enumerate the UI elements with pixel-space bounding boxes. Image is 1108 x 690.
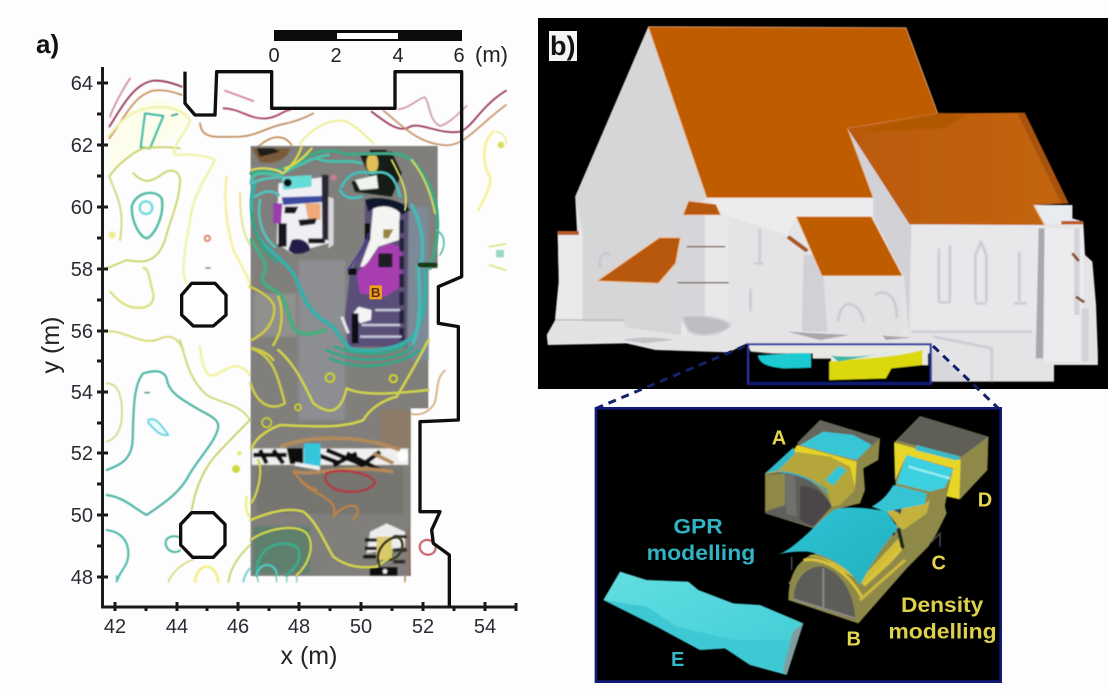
panel label: a): a)	[36, 29, 59, 59]
x axis	[104, 602, 516, 670]
y axis: 54	[71, 382, 93, 404]
label: Density modelling	[888, 593, 997, 643]
y axis: 62	[71, 135, 93, 157]
letter labels in inset: B	[846, 628, 861, 650]
recess wall between roofs	[848, 128, 911, 332]
panel b: 3D church model	[538, 18, 1108, 389]
letter labels in inset: D	[978, 490, 992, 512]
vaulted structure B (upper part)	[777, 507, 907, 617]
windows and wall details	[600, 228, 1032, 382]
label: GPR modelling: modelling	[647, 541, 755, 565]
buried structures in overview	[748, 345, 930, 368]
scale bar: 4	[392, 45, 404, 67]
letter labels in inset	[772, 428, 992, 650]
vaulted structure B (front arch)	[788, 533, 940, 623]
x axis: 54	[474, 616, 496, 638]
top-left brown patch	[252, 148, 290, 163]
gable wall	[575, 27, 707, 335]
pillar: lower octagon	[181, 513, 225, 557]
scale bar: 2	[330, 45, 342, 67]
x axis: 44	[166, 616, 188, 638]
y axis: 52	[71, 443, 93, 465]
wall outline	[185, 72, 462, 607]
main roof	[648, 27, 938, 198]
turret	[681, 215, 729, 335]
letter labels in inset: A	[772, 428, 786, 450]
porch roof	[796, 217, 902, 276]
letter labels in inset: C	[931, 552, 946, 574]
building walls	[547, 27, 1098, 382]
y axis: 48	[71, 567, 93, 589]
olive base behind passage and vault	[788, 500, 947, 623]
anomaly A block	[273, 150, 410, 347]
letter label E: E	[671, 649, 684, 671]
GPR model E	[603, 572, 803, 675]
geophysics raster image	[250, 146, 444, 576]
chancel wall	[911, 225, 1039, 332]
y axis: 60	[71, 197, 93, 219]
anomaly label B: B	[371, 285, 381, 300]
x axis: 52	[412, 616, 434, 638]
scale bar: (m)	[475, 42, 508, 67]
y axis: y (m)	[37, 317, 65, 373]
bottom right anomaly	[367, 523, 405, 553]
y axis	[37, 67, 516, 607]
y axis: 56	[71, 321, 93, 343]
label: GPR modelling	[647, 514, 755, 565]
structure D and passage C	[872, 416, 988, 567]
label: GPR modelling: GPR	[673, 514, 723, 538]
turret cap	[683, 201, 721, 215]
y axis: 50	[71, 505, 93, 527]
scale bar	[268, 30, 508, 67]
contour lines outside the raster	[107, 72, 506, 607]
lower half, coordinates offset by 960	[107, 340, 445, 582]
structure A	[765, 420, 880, 528]
label: Density modelling: modelling	[888, 619, 997, 643]
side aisle roof	[597, 238, 680, 283]
dashed zoom connector lines	[597, 346, 998, 408]
chancel roof	[848, 113, 1069, 225]
porch	[813, 278, 902, 335]
y axis: 64	[71, 73, 93, 95]
anomaly band at y 52	[252, 438, 408, 575]
anomaly top centre	[352, 152, 402, 197]
x axis: 48	[288, 616, 310, 638]
x axis: 46	[227, 616, 249, 638]
inset panel: subsurface models	[596, 408, 1001, 682]
y axis: 58	[71, 259, 93, 281]
x axis: x (m)	[281, 642, 337, 670]
scale bar: 0	[268, 45, 280, 67]
pillar: upper octagon	[182, 283, 226, 326]
church model	[547, 27, 1098, 384]
structures A, C, D, B	[765, 416, 988, 623]
scale bar: 6	[453, 45, 465, 67]
raster overlay contours	[250, 147, 444, 575]
panel a: contour map	[107, 72, 506, 607]
label: Density modelling: Density	[901, 593, 983, 617]
small roof strips and caps	[788, 237, 807, 251]
panel label: b): b)	[550, 31, 575, 61]
anomaly B block	[345, 203, 408, 347]
x axis: 42	[104, 616, 126, 638]
x axis: 50	[350, 616, 372, 638]
